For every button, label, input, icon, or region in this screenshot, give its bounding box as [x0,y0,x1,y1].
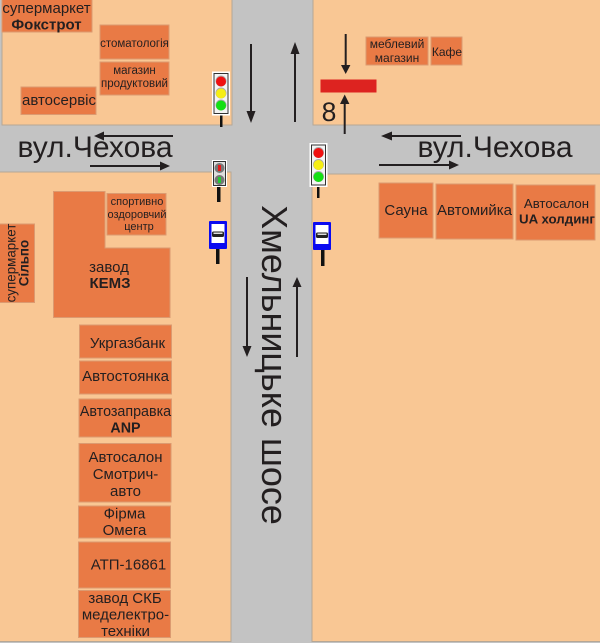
building: ANP filling station [79,399,172,437]
building: Smotrych-auto dealer: авто [110,483,141,500]
arrow: down to destination [341,34,350,74]
panel: north-west block [2,0,232,125]
building: ATP-16861: АТП-16861 [91,556,166,574]
icon: traffic light east [310,143,328,198]
arrow: up to destination [340,94,349,134]
building: Ukrgasbank: Укргазбанк [90,335,166,352]
building: KEMZ plant: КЕМЗ [89,275,131,292]
building: ANP filling station: ANP [110,420,141,436]
destination number: 8 [322,97,336,127]
building: ATP-16861 [78,542,170,588]
building: furniture store: магазин [375,51,419,65]
building: SKB plant: техніки [101,623,150,640]
arrow: south highway southbound [242,277,252,357]
building: car park: Автостоянка [82,368,170,385]
icon: traffic light north-west [212,72,230,127]
building: dentistry: стоматологія [100,38,169,50]
building: car wash: Автомийка [437,202,513,219]
building: KEMZ plant: завод [89,259,129,276]
building: sauna [379,183,433,238]
building: grocery store [100,62,169,95]
building: SKB plant: завод СКБ [88,590,162,607]
building: car service: автосервіс [22,92,97,109]
building: supermarket Foxtrot: Фокстрот [11,16,82,34]
street label: Khmelnytske highway: Хмельницьке шосе [254,205,295,525]
building: cafe: Кафе [432,45,462,59]
arrow: west road westbound [94,132,173,140]
building: car wash [436,184,513,239]
arrow: north highway northbound [290,42,300,122]
building: Smotrych-auto dealer: Автосалон [88,449,163,466]
building: sports and fitness center [107,194,166,235]
building: supermarket Silpo: Сільпо [16,240,32,286]
building: Ukrgasbank [80,325,172,358]
icon: bus stop west [209,221,227,264]
building: grocery store: магазин [113,65,156,77]
building: car dealer UA holding: UA холдинг [519,212,595,226]
building: supermarket Foxtrot [2,0,92,34]
building: car park [80,361,172,394]
building: SKB plant [78,590,170,640]
arrow: south highway northbound [292,277,302,357]
street label: east Chekhova: вул.Чехова [417,131,573,164]
building: car service [21,87,97,114]
building: dentistry [100,25,169,59]
building: sports and fitness center: спортивно [111,196,163,208]
panel: north-east block [313,0,600,125]
icon: pedestrian traffic light [212,160,227,202]
building: supermarket Foxtrot: супермаркет [2,0,91,17]
arrow: north highway southbound [246,44,256,123]
building: ANP filling station: Автозаправка [80,404,171,420]
building: sauna: Сауна [384,202,428,219]
building: furniture store: меблевий [370,37,424,51]
building: Omega company: Фірма [104,506,146,522]
panel: south-east block [312,174,600,642]
building: KEMZ plant [54,192,170,318]
arrow: east road eastbound [379,160,459,170]
building: car dealer UA holding [516,185,595,240]
street label: west Chekhova: вул.Чехова [17,131,173,164]
arrow: west road eastbound [90,162,170,170]
building: supermarket Silpo: супермаркет [4,224,18,302]
icon: bus stop east [313,222,331,266]
building: supermarket Silpo [0,224,34,302]
building: Smotrych-auto dealer [79,444,171,502]
building: cafe [431,37,462,65]
building: sports and fitness center: центр [124,221,154,233]
destination marker: building 8 [320,80,376,92]
building: grocery store: продуктовий [101,78,168,90]
building: car dealer UA holding: Автосалон [524,196,589,211]
building: SKB plant: меделектро- [82,606,169,624]
building: Omega company [78,506,170,539]
building: sports and fitness center: оздоровчий [108,209,166,221]
arrow: east road westbound [381,132,461,140]
building: Smotrych-auto dealer: Смотрич- [93,466,158,483]
building: Omega company: Омега [103,522,147,539]
building: furniture store [366,37,428,65]
panel: south-west block [0,172,231,642]
